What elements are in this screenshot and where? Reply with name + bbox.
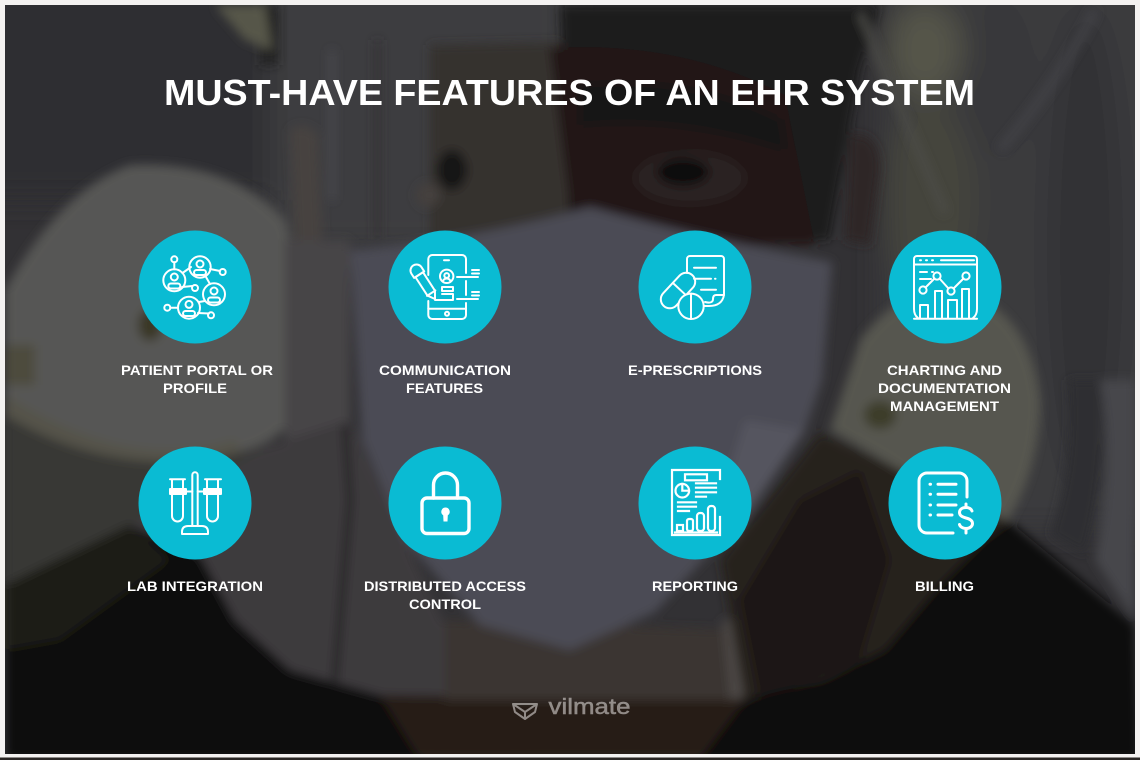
shield rim	[854, 8, 880, 63]
feature: lab integration	[127, 446, 263, 594]
label: DOCUMENTATION	[878, 380, 1011, 396]
label: PROFILE	[163, 380, 227, 396]
label: CONTROL	[409, 596, 481, 612]
left lower ground and jacket	[5, 415, 270, 585]
label: FEATURES	[406, 380, 483, 396]
keyhole	[441, 508, 450, 522]
icon: prescription sheet and pills	[638, 230, 752, 344]
label	[121, 362, 273, 396]
label: MANAGEMENT	[890, 398, 999, 414]
right lemon	[830, 290, 1040, 525]
label: BILLING	[915, 578, 974, 594]
feature: charting and documentation management	[878, 230, 1011, 414]
feature: distributed access control	[364, 446, 526, 612]
icon: test tubes on stand	[138, 446, 252, 560]
feature: reporting	[638, 446, 752, 594]
feature: communication features	[379, 230, 511, 396]
feature: billing	[888, 446, 1002, 594]
icon: browser window with charts	[888, 230, 1002, 344]
lower centre	[376, 696, 744, 754]
label: PATIENT PORTAL OR	[121, 362, 273, 378]
hair and forehead	[550, 5, 880, 240]
icon: padlock	[388, 446, 502, 560]
label: DISTRIBUTED ACCESS	[364, 578, 526, 594]
right lower jacket	[700, 432, 1135, 760]
feature: patient portal or profile	[121, 230, 273, 396]
label	[379, 362, 511, 396]
label: CHARTING AND	[887, 362, 1002, 378]
label	[878, 362, 1011, 414]
jacket crease	[335, 425, 350, 680]
icon: phone with pencil	[388, 230, 502, 344]
logo mark	[513, 704, 537, 719]
bottom dark strip	[0, 758, 1140, 760]
black shoulder left	[5, 530, 419, 754]
label: LAB INTEGRATION	[127, 578, 263, 594]
logo wordmark: vilmate	[548, 694, 630, 719]
left lemon	[5, 165, 303, 465]
upper face	[430, 42, 570, 240]
label: COMMUNICATION	[379, 362, 511, 378]
icon: bill with dollar sign	[888, 446, 1002, 560]
feature: e-prescriptions	[628, 230, 762, 378]
icon: report document with charts	[638, 446, 752, 560]
label: E-PRESCRIPTIONS	[628, 362, 762, 378]
label	[364, 578, 526, 612]
right edge arcs	[1095, 380, 1135, 620]
title: MUST-HAVE FEATURES OF AN EHR SYSTEM	[164, 72, 975, 113]
icon: connected patient profiles	[138, 230, 252, 344]
mask	[350, 207, 832, 650]
logo: vilmate	[513, 694, 630, 719]
label: REPORTING	[652, 578, 738, 594]
